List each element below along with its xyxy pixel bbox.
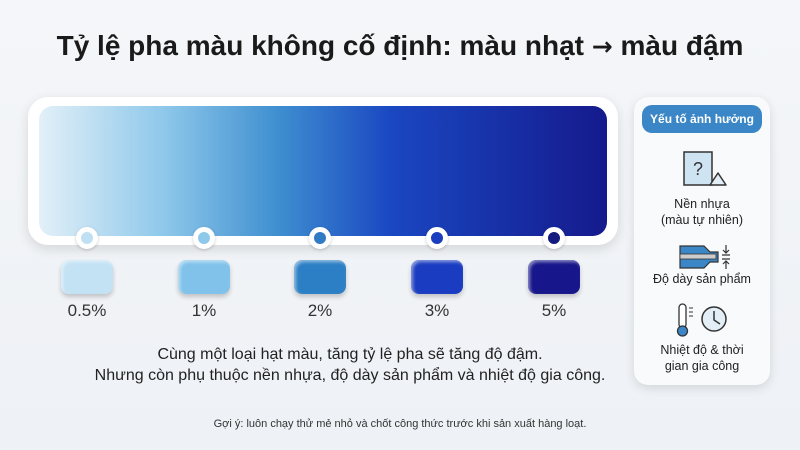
text: resin: (màu tự nhiên) xyxy=(661,213,743,227)
markers xyxy=(74,226,566,252)
text: thickness: Độ dày sản phẩm xyxy=(653,272,751,286)
icon: thermometer and clock xyxy=(676,303,727,337)
icon: resin bag: ? xyxy=(693,159,703,179)
swatches: 3% xyxy=(425,301,449,320)
text: resin: Nền nhựa xyxy=(674,197,730,211)
icon: resin bag xyxy=(683,151,727,186)
text: temperature: Nhiệt độ & thời xyxy=(660,343,744,357)
explanation text: Cùng một loại hạt màu, tăng tỷ lệ pha sẽ tăng độ đậm. xyxy=(157,346,543,363)
panel: factors xyxy=(634,97,770,385)
explanation text: Nhưng còn phụ thuộc nền nhựa, độ dày sản phẩm và nhiệt độ gia công. xyxy=(95,367,605,384)
footnote: Gợi ý: luôn chạy thử mẻ nhỏ và chốt công thức trước khi sản xuất hàng loạt. xyxy=(214,418,586,430)
swatches: 0.5% xyxy=(68,301,106,320)
swatches: 1% xyxy=(192,301,216,320)
text: temperature: gian gia công xyxy=(665,359,739,373)
gradient bar panel xyxy=(28,97,618,245)
swatches xyxy=(59,260,582,320)
badge: Yếu tố ảnh hưởng xyxy=(650,112,754,126)
badge xyxy=(642,105,762,133)
icon: thickness xyxy=(679,245,730,269)
text: temperature xyxy=(660,343,744,373)
text: resin xyxy=(661,197,743,227)
gradient bar xyxy=(39,106,607,236)
title: Tỷ lệ pha màu không cố định: màu nhạt → màu đậm xyxy=(57,30,743,61)
swatches: 5% xyxy=(542,301,566,320)
explanation text xyxy=(95,346,605,384)
swatches: 2% xyxy=(308,301,332,320)
